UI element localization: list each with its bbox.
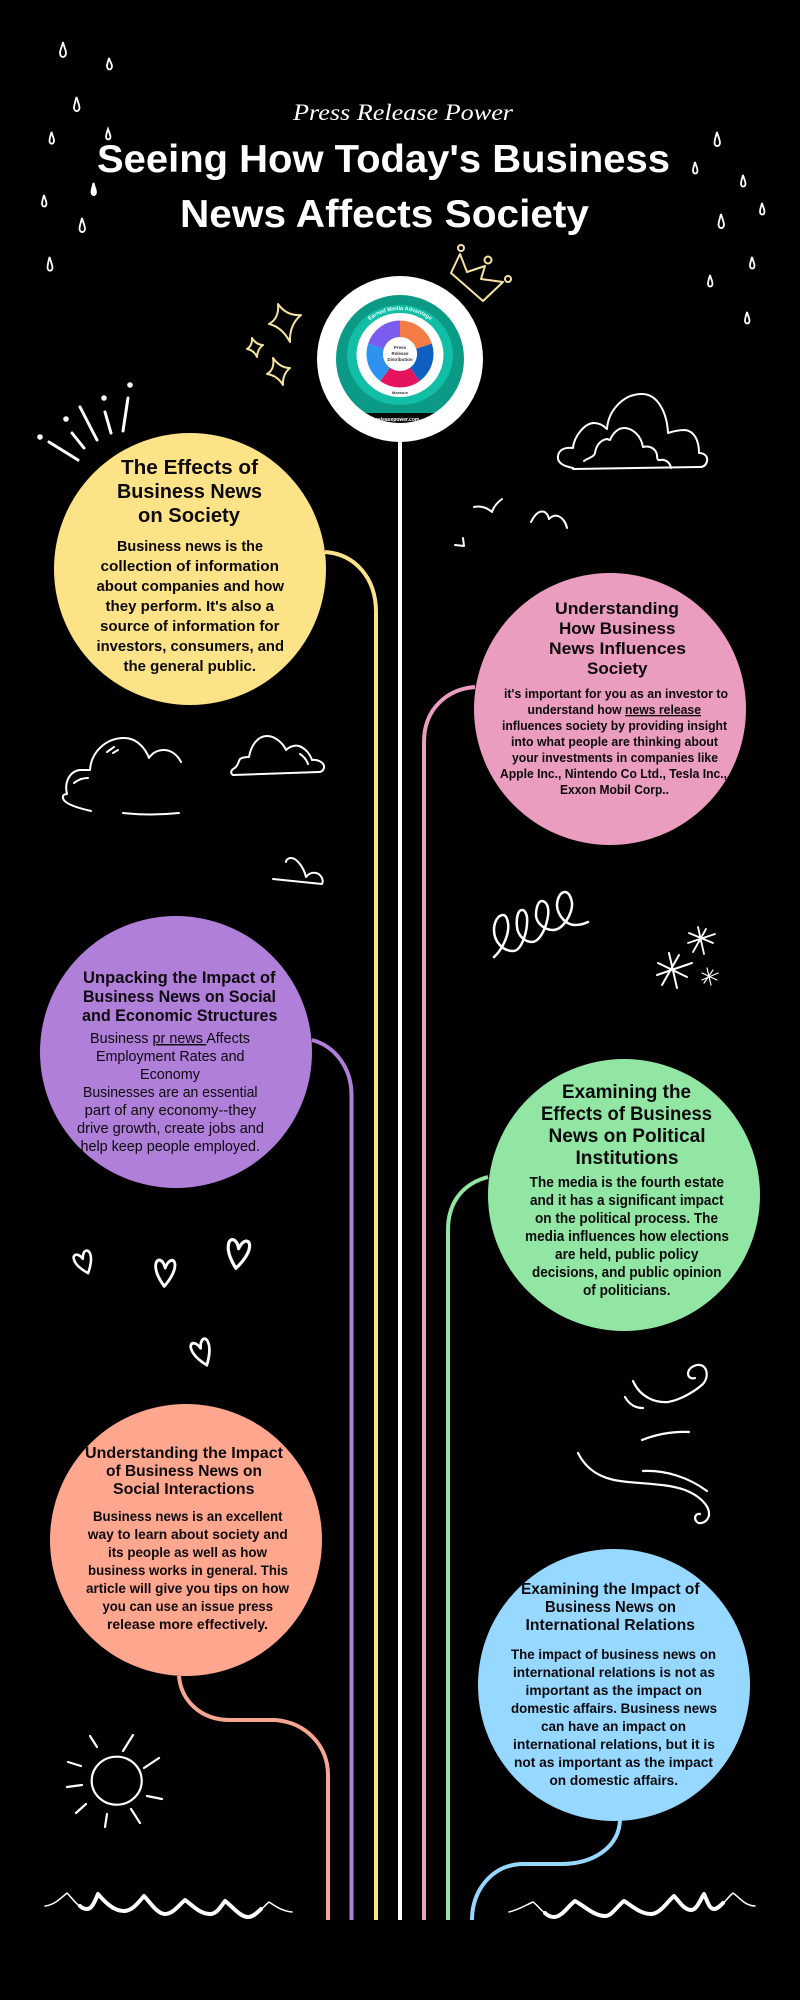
emblem chart: Release	[391, 351, 409, 356]
icon: heart 2	[155, 1259, 175, 1287]
panel body text	[525, 1175, 729, 1299]
icon: asterisk stars	[657, 927, 718, 988]
panel body text: not as important as the impact	[514, 1754, 713, 1770]
panel body text: collection of information	[100, 558, 279, 575]
panel body text: can have an impact on	[541, 1718, 686, 1734]
panel circle: purple	[40, 916, 312, 1188]
icon: wave right	[509, 1893, 755, 1917]
panel circle: pink	[474, 573, 746, 845]
panel body text: media influences how elections	[525, 1229, 729, 1245]
panel body text: decisions, and public opinion	[532, 1265, 722, 1281]
panel body text: business works in general. This	[88, 1562, 288, 1578]
panel heading: Business News on	[545, 1599, 676, 1616]
panel body text: are held, public policy	[555, 1247, 698, 1263]
panel body text: Business pr news Affects	[90, 1031, 250, 1047]
panel body text: understand how news release	[528, 702, 701, 717]
panel body text: they perform. It's also a	[106, 598, 275, 615]
panel heading: Society	[587, 659, 648, 678]
panel heading	[117, 457, 262, 527]
emblem chart: pressreleasepower.com	[363, 417, 420, 423]
panel heading	[82, 969, 278, 1025]
panel heading	[85, 1445, 283, 1498]
panel: Examining the Impact of Business News on International Relations	[478, 1549, 750, 1821]
panel body text: help keep people employed.	[80, 1139, 260, 1155]
panel: Understanding the Impact of Business News on Social Interactions	[50, 1404, 322, 1676]
panel circle: blue	[478, 1549, 750, 1821]
panel body text: international relations is not as	[513, 1664, 715, 1680]
icon: outline cloud left	[63, 738, 181, 814]
emblem white ring	[317, 276, 483, 442]
connector: green	[448, 1177, 488, 1920]
icon: rain drops left	[42, 42, 112, 271]
panel body text: The impact of business news on	[511, 1646, 716, 1662]
panel circle: salmon	[50, 1404, 322, 1676]
panel body text: Exxon Mobil Corp..	[560, 782, 669, 797]
panel heading: Unpacking the Impact of	[83, 969, 276, 987]
panel heading: Business News	[117, 481, 262, 503]
emblem chart: Press	[394, 345, 407, 350]
panel heading: News on Political	[548, 1126, 706, 1147]
icon: burst rays	[39, 384, 131, 460]
icon: heart 1	[72, 1250, 96, 1276]
panel body text: Businesses are an essential	[83, 1085, 258, 1101]
panel body text: source of information for	[100, 618, 280, 635]
panel body text: part of any economy--they	[85, 1103, 257, 1119]
panel body text: of politicians.	[583, 1283, 670, 1299]
panel body text: release more effectively.	[107, 1616, 268, 1632]
central emblem	[317, 276, 483, 442]
panel body text: The media is the fourth estate	[530, 1175, 724, 1191]
panel body text	[511, 1646, 717, 1788]
panel body text: way to learn about society and	[87, 1526, 288, 1542]
icon: large cloud right	[558, 394, 707, 469]
panel body text: international relations, but it is	[513, 1736, 715, 1752]
panel heading: International Relations	[526, 1617, 695, 1634]
icon: heart 4	[189, 1338, 215, 1368]
panel heading: Examining the Impact of	[521, 1581, 700, 1598]
panel body text	[77, 1031, 264, 1155]
title: News Affects Society	[180, 193, 589, 236]
panel body text: influences society by providing insight	[502, 718, 728, 733]
panel body text	[96, 538, 284, 675]
panel heading: News Influences	[549, 639, 686, 658]
panel body text: drive growth, create jobs and	[77, 1121, 264, 1137]
panel body text: Economy	[140, 1067, 201, 1083]
panel body text: it's important for you as an investor to	[504, 686, 728, 701]
panel circle: green	[488, 1059, 760, 1331]
icon: outline cloud middle	[231, 736, 324, 775]
panel body text: Business news is the	[117, 538, 263, 555]
panel body text: investors, consumers, and	[96, 638, 284, 655]
connector: salmon	[179, 1676, 328, 1920]
connector lines	[179, 440, 620, 1920]
panel heading: Understanding the Impact	[85, 1445, 283, 1462]
emblem chart	[336, 295, 464, 423]
panel body text: into what people are thinking about	[511, 734, 719, 749]
panel body text: its people as well as how	[108, 1544, 267, 1560]
panel heading: of Business News on	[106, 1463, 262, 1480]
panel body text: Apple Inc., Nintendo Co Ltd., Tesla Inc.,	[500, 766, 727, 781]
panel: Examining the Effects of Business News on Political Institutions	[488, 1059, 760, 1331]
title: Seeing How Today's Business	[97, 138, 670, 181]
panel body text: Employment Rates and	[96, 1049, 244, 1065]
connector: centre white line	[398, 440, 402, 1920]
panel heading: and Economic Structures	[82, 1007, 278, 1025]
panel body text: the general public.	[124, 658, 256, 675]
icon: rain drops right	[693, 132, 764, 324]
panel body text: on the political process. The	[535, 1211, 718, 1227]
icon: wave left	[45, 1893, 292, 1917]
panel heading: Institutions	[576, 1148, 678, 1169]
icon: birds	[455, 499, 567, 546]
panel body text: article will give you tips on how	[86, 1580, 289, 1596]
icon: heart 3	[225, 1239, 250, 1270]
emblem chart: Earned Media Advantage	[368, 306, 432, 320]
panel heading	[549, 599, 686, 678]
emblem chart: Measure	[392, 390, 409, 395]
panel heading: Understanding	[555, 599, 679, 618]
panel heading: on Society	[138, 505, 241, 527]
panel: The Effects of Business News on Society	[54, 433, 326, 705]
panel body text: domestic affairs. Business news	[511, 1700, 717, 1716]
icon: small cloud	[273, 858, 323, 884]
title	[97, 138, 670, 236]
panel: Unpacking the Impact of Business News on Social and Economic Structures	[40, 916, 312, 1188]
panel heading: How Business	[559, 619, 676, 638]
panel body text: important as the impact on	[526, 1682, 702, 1698]
panel heading: The Effects of	[121, 457, 258, 479]
icon: wind swirls	[578, 1365, 709, 1523]
icon: sun	[67, 1735, 162, 1827]
panel body text: you can use an issue press	[102, 1598, 273, 1614]
icon: crown	[451, 245, 511, 301]
panel heading: Business News on Social	[83, 988, 276, 1006]
panel heading: Examining the	[562, 1082, 691, 1103]
icon: spiral loops	[494, 892, 588, 957]
panel: Understanding How Business News Influences Society	[474, 573, 746, 845]
panel body text: on domestic affairs.	[550, 1772, 678, 1788]
connector: purple	[312, 1040, 352, 1920]
panel heading: Effects of Business	[541, 1104, 712, 1125]
connector: yellow	[325, 552, 376, 1920]
icon: sparkle stars	[247, 304, 301, 385]
panel body text	[86, 1508, 289, 1632]
panel body text: Business news is an excellent	[93, 1508, 283, 1524]
panel heading	[521, 1581, 700, 1634]
connector: pink	[424, 687, 475, 1920]
panel heading	[541, 1082, 712, 1169]
panel body text: your investments in companies like	[512, 750, 718, 765]
panel heading: Social Interactions	[113, 1481, 254, 1498]
panel body text	[500, 686, 728, 797]
connector: blue	[472, 1820, 620, 1920]
panel circle: yellow	[54, 433, 326, 705]
emblem chart: Distribution	[387, 357, 413, 362]
panel body text: about companies and how	[96, 578, 284, 595]
subtitle: Press Release Power: Press Release Power	[292, 100, 514, 125]
panel body text: and it has a significant impact	[530, 1193, 724, 1209]
